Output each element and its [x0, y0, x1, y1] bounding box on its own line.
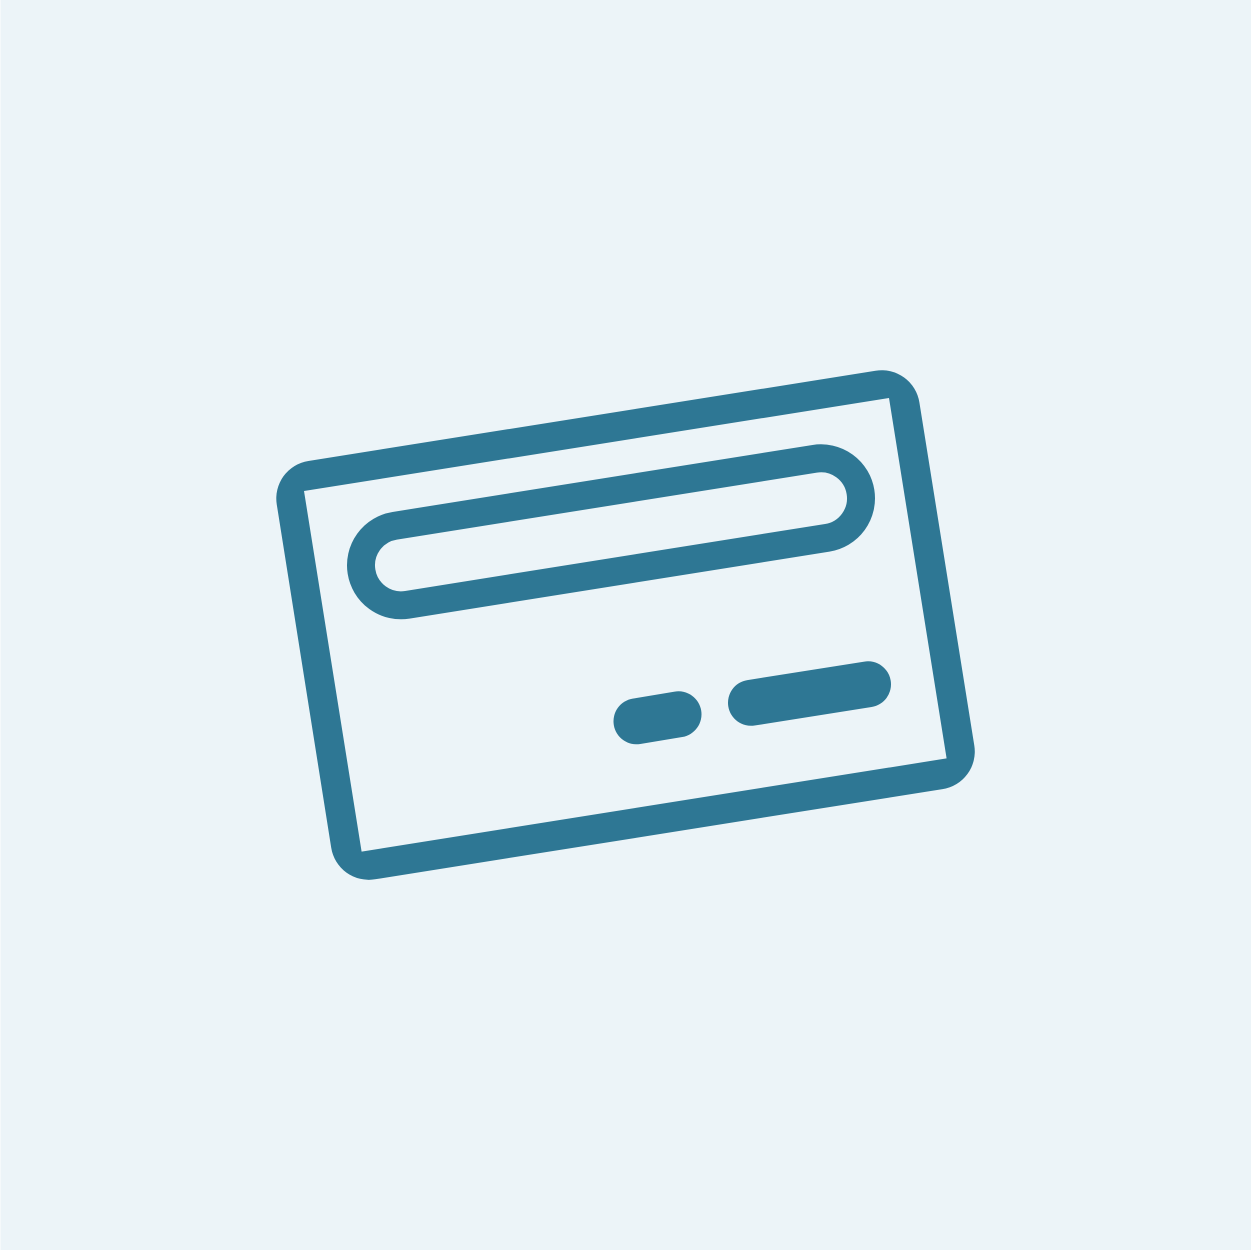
card stripe — [355, 453, 867, 611]
icon: tilted payment card — [276, 370, 975, 880]
short card dash — [636, 714, 678, 721]
card outline — [276, 370, 975, 880]
long card dash — [751, 684, 868, 703]
